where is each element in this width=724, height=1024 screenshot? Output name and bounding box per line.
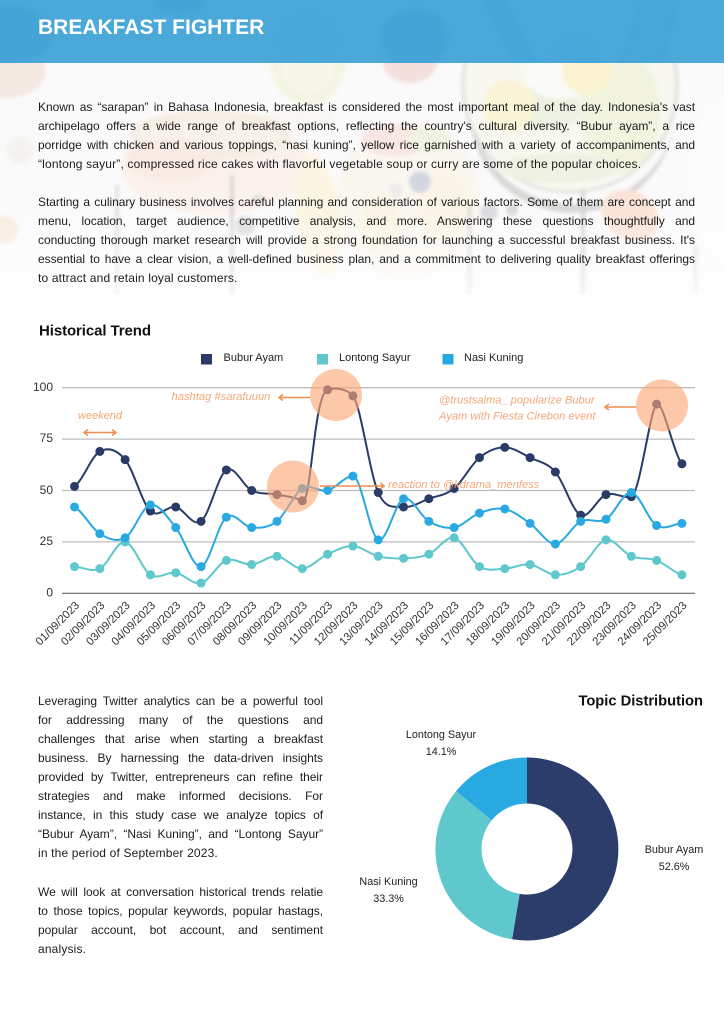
- body text paragraph 2: to those topics, popular keywords, popular hastags,: [38, 904, 323, 918]
- y axis labels: [33, 380, 53, 600]
- label: Bubur Ayam: Bubur Ayam: [645, 844, 703, 856]
- label: Lontong Sayur: [406, 729, 477, 758]
- legend: [201, 352, 523, 364]
- pie heading: Topic Distribution: [578, 694, 703, 710]
- series: Lontong Sayur: [74, 538, 682, 583]
- x axis date labels: 04/09/2023: [110, 600, 158, 648]
- annotation: trustsalma: [438, 394, 636, 422]
- x axis date labels: 15/09/2023: [388, 600, 436, 648]
- slice: Bubur Ayam: [512, 758, 618, 940]
- intro paragraph 2: [38, 195, 695, 285]
- intro paragraph 2: Starting a culinary business involves careful planning and consideration of various factors. Some of them are concept and: [38, 195, 695, 209]
- annotation: weekend: [78, 410, 123, 436]
- line series: [74, 389, 682, 583]
- intro paragraph 2: essential to have a clear vision, a well-defined business plan, and a commitment to delivering quality breakfast offerings: [38, 252, 695, 266]
- annotation: hashtag: hashtag #sarafuuun: [172, 391, 270, 403]
- x axis date labels: 05/09/2023: [135, 600, 183, 648]
- annotation: trustsalma: @trustsalma_ popularize Bubur: [439, 394, 596, 406]
- x axis date labels: 23/09/2023: [590, 600, 639, 648]
- body text paragraph 2: analysis.: [38, 942, 86, 956]
- header band: [0, 0, 724, 63]
- x axis date labels: 08/09/2023: [211, 600, 259, 648]
- series: Nasi Kuning: [74, 476, 682, 567]
- y axis labels: 25: [40, 534, 53, 548]
- x axis date labels: 01/09/2023: [34, 600, 82, 648]
- x axis date labels: 12/09/2023: [312, 600, 361, 648]
- label: Bubur Ayam: 52.6%: [659, 861, 690, 873]
- intro paragraph 1: Known as “sarapan” in Bahasa Indonesia, breakfast is considered the most important meal of the day. Indonesia's vast: [38, 100, 695, 114]
- legend: Lontong Sayur: [339, 352, 411, 364]
- body text paragraph 1: “Bubur Ayam”, “Nasi Kuning”, and “Lontong Sayur”: [38, 827, 323, 841]
- intro paragraph 2: to attract and retain loyal customers.: [38, 271, 238, 285]
- x axis date labels: 09/09/2023: [236, 600, 285, 648]
- x axis date labels: [34, 600, 690, 648]
- label: Bubur Ayam: [645, 844, 703, 873]
- legend: Bubur Ayam: [224, 352, 283, 364]
- x axis date labels: 17/09/2023: [439, 600, 487, 648]
- label: Nasi Kuning: 33.3%: [373, 893, 404, 905]
- panel: historical trend chart: [33, 322, 695, 648]
- y axis labels: 50: [40, 483, 53, 497]
- x axis date labels: 02/09/2023: [59, 600, 107, 648]
- body text paragraph 2: We will look at conversation historical trends relatie: [38, 885, 323, 899]
- annotation: reaction: reaction to @kdrama_menfess: [388, 479, 540, 491]
- chart heading: Historical Trend: [39, 322, 151, 340]
- y axis labels: 100: [33, 380, 53, 394]
- annotation: trustsalma: Ayam with Fiesta Cirebon event: [438, 410, 596, 422]
- intro paragraph 1: “lontong sayur”, compressed rice cakes with flavorful vegetable soup or curry are some of the popular choices.: [38, 157, 641, 171]
- x axis date labels: 25/09/2023: [641, 600, 690, 648]
- annotation: weekend: weekend: [78, 410, 123, 422]
- intro paragraph 1: archipelago offers a wide range of breakfast options, reflecting the country's cultural diversity. “Bubur ayam”, a rice: [38, 119, 695, 133]
- x axis date labels: 19/09/2023: [489, 600, 538, 648]
- intro paragraph 1: porridge with chicken and various toppings, “nasi kuning”, yellow rice garnished with a variety of accompaniments, and: [38, 138, 695, 152]
- body text paragraph 1: business. By harnessing the data-driven insights: [38, 751, 323, 765]
- intro paragraph 2: menu, location, target audience, competitive analysis, and more. Answering these questions thoughtfully and: [38, 214, 695, 228]
- title: BREAKFAST FIGHTER: [38, 16, 264, 39]
- intro paragraph 1: [38, 100, 695, 171]
- x axis date labels: 13/09/2023: [337, 600, 386, 648]
- x axis date labels: 18/09/2023: [464, 600, 512, 648]
- panel: topic distribution: [359, 694, 703, 940]
- donut chart: [435, 758, 618, 940]
- label: Nasi Kuning: [359, 876, 418, 905]
- body text paragraph 2: [38, 885, 323, 956]
- series: Bubur Ayam: [74, 389, 682, 523]
- legend: Nasi Kuning: [464, 352, 523, 364]
- intro paragraph 2: conducting thorough market research will provide a strong foundation for launching a successful breakfast business. It's: [38, 233, 695, 247]
- x axis date labels: 20/09/2023: [515, 600, 563, 648]
- body text paragraph 1: Leveraging Twitter analytics can be a powerful tool: [38, 694, 323, 708]
- x axis date labels: 16/09/2023: [413, 600, 462, 648]
- x axis date labels: 10/09/2023: [261, 600, 310, 648]
- highlight circles: [267, 369, 688, 512]
- annotation: reaction: [320, 479, 540, 491]
- x axis date labels: 21/09/2023: [540, 600, 588, 648]
- body text paragraph 1: for addressing many of the questions and: [38, 713, 323, 727]
- background food photo: [0, 63, 698, 294]
- slice: Lontong Sayur: [456, 758, 527, 820]
- x axis date labels: 07/09/2023: [186, 600, 234, 648]
- body text paragraph 1: instance, in this study case we analyze topics of: [38, 808, 323, 822]
- x axis date labels: 11/09/2023: [287, 600, 335, 648]
- body text paragraph 2: popular account, bot account, and sentiment: [38, 923, 323, 937]
- label: Lontong Sayur: 14.1%: [426, 746, 457, 758]
- body text paragraph 1: in the period of September 2023.: [38, 846, 218, 860]
- x axis date labels: 06/09/2023: [160, 600, 209, 648]
- header photo tint: [0, 0, 724, 63]
- body text paragraph 1: strategies and make informed decisions. For: [38, 789, 323, 803]
- body text paragraph 1: challenges that arise when starting a breakfast: [38, 732, 323, 746]
- body text paragraph 1: [38, 694, 324, 860]
- x axis date labels: 14/09/2023: [363, 600, 411, 648]
- label: Lontong Sayur: Lontong Sayur: [406, 729, 477, 741]
- label: Nasi Kuning: Nasi Kuning: [359, 876, 418, 888]
- x axis date labels: 22/09/2023: [565, 600, 614, 648]
- y axis labels: 75: [40, 431, 53, 445]
- body text paragraph 1: provided by Twitter, entrepreneurs can refine their: [38, 770, 323, 784]
- x axis date labels: 03/09/2023: [84, 600, 133, 648]
- y axis labels: 0: [46, 586, 53, 600]
- x axis date labels: 24/09/2023: [616, 600, 664, 648]
- slice: Nasi Kuning: [435, 791, 520, 939]
